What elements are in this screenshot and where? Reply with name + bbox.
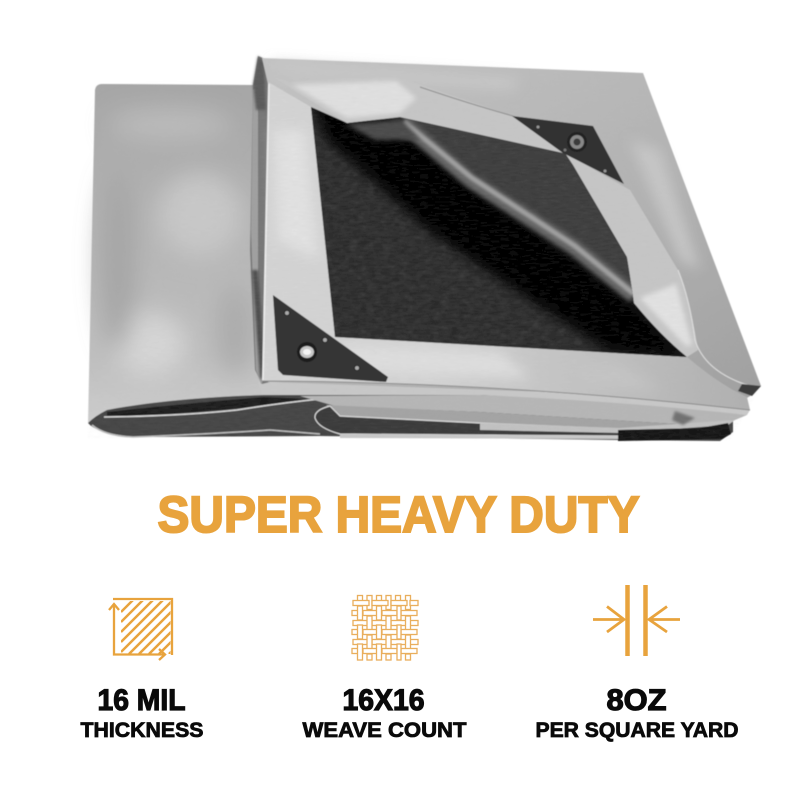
icon: basket weave [352, 596, 418, 660]
dark bottom of side fold [252, 270, 266, 380]
icon: thickness square with arrows [109, 599, 174, 660]
curved flap edge line [678, 270, 750, 386]
highlights on front band [274, 130, 660, 390]
stat: thickness [80, 599, 204, 742]
product photo: folded silver and black tarp [85, 55, 765, 443]
lower thin light line [92, 425, 320, 437]
woven mottling on the lower-left [318, 148, 601, 344]
grey upper sheet surface [262, 58, 761, 399]
infographic canvas [80, 55, 762, 742]
base light edge [340, 434, 618, 439]
curved light fold line [104, 399, 320, 417]
upper shaded half of the peeled panel [413, 121, 630, 283]
highlights on left fold [100, 109, 253, 377]
black underside panel [310, 106, 687, 358]
value: 8oz: 8OZ [606, 684, 666, 717]
diffuse woven crease [402, 122, 634, 296]
icon: compression arrows between two lines [593, 585, 680, 656]
silver layer second [300, 395, 747, 425]
light strip above black strip [480, 420, 735, 433]
black triangular corner patch with grommet, upper right [512, 116, 624, 184]
oval fold dark interior [315, 406, 620, 436]
silver inner flap: top edge [273, 77, 563, 153]
crease line on flap [420, 87, 513, 116]
label: per square yard: PER SQUARE YARD [536, 719, 738, 742]
bright sheen at flap corner [640, 284, 692, 346]
black strip at base [618, 423, 731, 441]
bright sheen on the flap [292, 81, 416, 118]
bright woven crease core [404, 122, 634, 294]
dark top of side fold [253, 56, 266, 110]
silver inner flap: right side [565, 153, 698, 357]
dark underside of folded layers [88, 385, 733, 441]
label: thickness: THICKNESS [80, 719, 204, 742]
silver layer strip [258, 382, 750, 415]
value: 16 mil: 16 MIL [98, 684, 186, 717]
stat: weave count [302, 596, 467, 742]
left folded silver section [88, 84, 264, 423]
label: weave count: WEAVE COUNT [302, 719, 467, 742]
heading: SUPER HEAVY DUTY [158, 486, 640, 543]
deep shadow under the fold [311, 100, 690, 360]
tip of upper right corner [738, 384, 761, 396]
seams on front band [262, 381, 750, 410]
sheen on grey sheet [270, 62, 700, 270]
edge of main sheet with dark side fold [250, 56, 270, 384]
very dark wedge below left fold [107, 397, 310, 417]
black triangular corner patch with grommet, lower left [273, 295, 388, 382]
silver front border band [262, 82, 750, 410]
fabric weave texture [114, 111, 730, 438]
grey layer third [326, 405, 693, 431]
stat: weight per square yard [536, 585, 738, 742]
bottom folded layers [92, 382, 750, 441]
value: 16x16: 16X16 [342, 684, 424, 717]
shaded tuck [672, 411, 695, 425]
